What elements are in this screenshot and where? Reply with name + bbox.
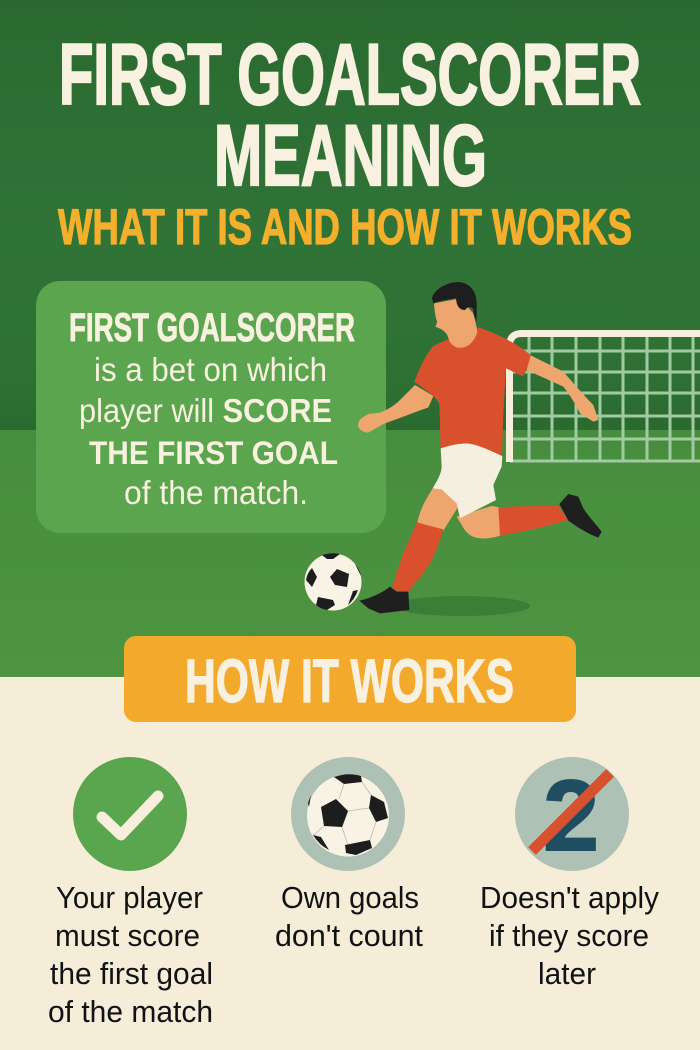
panel body text [79,351,338,511]
front leg [359,488,459,613]
panel heading: FIRST GOALSCORER [69,306,355,350]
goal net [510,334,700,462]
caption 1: must score [55,918,200,953]
icon: check mark [73,757,187,871]
title [59,27,641,204]
player shadow [394,596,530,616]
caption 1: the first goal [50,956,213,991]
icon: crossed out number two [515,757,629,872]
head and neck [434,298,478,350]
panel body text: THE FIRST GOAL [89,435,338,471]
definition panel [36,281,386,533]
back leg [457,494,602,538]
left arm [358,385,433,433]
background: dark green upper wall [0,0,700,431]
hair [432,282,477,322]
title: MEANING [214,108,487,204]
how it works banner: HOW IT WORKS [185,647,514,715]
background: cream lower section [0,677,700,1050]
soccer ball on pitch [304,553,362,610]
panel body text: of the match. [124,474,308,511]
caption 3 [480,880,659,991]
panel body text: is a bet on which [94,351,327,388]
caption 3: Doesn't apply [480,880,659,915]
caption 2: Own goals [281,880,419,915]
background: pitch [0,430,700,678]
player kicking [358,282,602,613]
panel body text: player will SCORE [79,392,332,429]
icon: soccer ball [291,757,405,871]
caption 3: later [538,956,596,991]
how it works banner [124,636,576,722]
shirt [414,327,531,456]
caption 2 [275,880,423,953]
column 2: own goals [275,757,423,953]
shorts [433,443,502,518]
caption 3: if they score [489,918,649,953]
caption 1: of the match [48,994,213,1029]
column 3: doesn't apply later [480,757,659,991]
caption 1 [48,880,213,1029]
icon: crossed out number two: 2 [543,760,599,872]
caption 1: Your player [56,880,203,915]
right arm [527,355,598,422]
column 1: must score first [48,757,213,1029]
caption 2: don't count [275,918,423,953]
